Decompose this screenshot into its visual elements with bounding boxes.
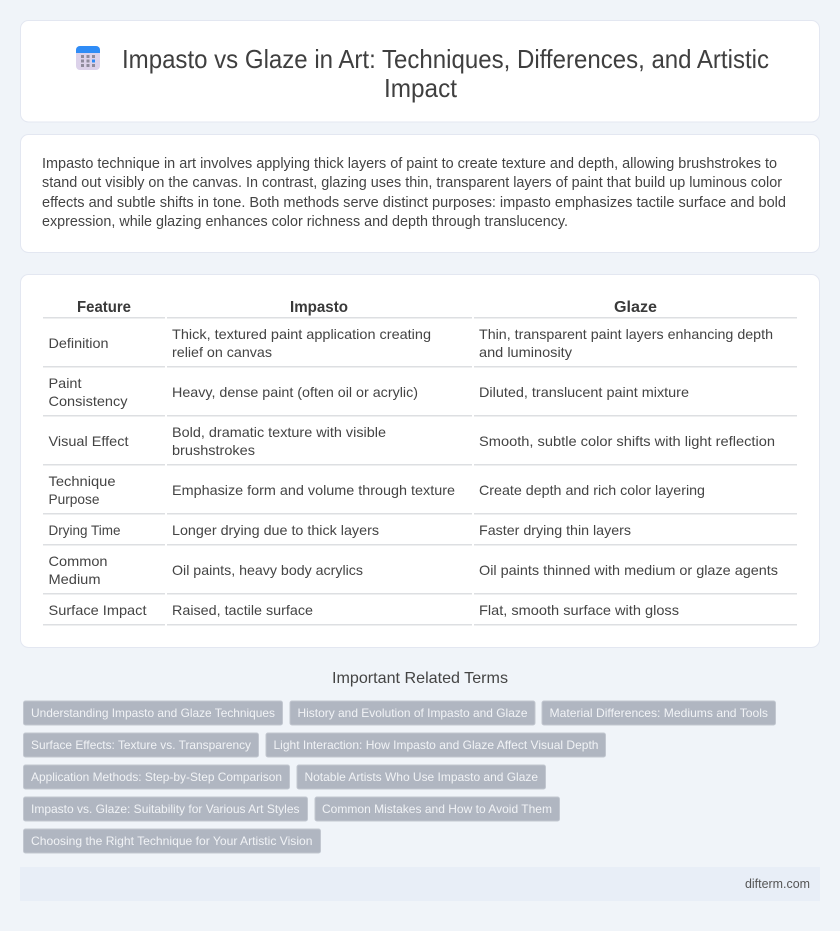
row: technique purpose: Create depth and rich color layering [479,482,705,498]
row: common medium: Oil paints thinned with medium or glaze agents [479,562,778,578]
panel: comparison table [20,274,820,648]
tag row 4 [24,797,560,821]
row: drying time: Faster drying thin layers [479,522,631,538]
row: common medium: Common [48,553,108,569]
row: drying time: Longer drying due to thick layers [172,522,379,538]
row: technique purpose: Emphasize form and volume through texture [172,482,455,498]
panel: related term tags [24,701,776,853]
row: paint consistency: Heavy, dense paint (often oil or acrylic) [172,384,418,400]
tag row 3: Notable Artists Who Use Impasto and Glaze [304,770,538,784]
tag row 5 [24,829,320,853]
tag row 4: Impasto vs. Glaze: Suitability for Various Art Styles [31,802,300,816]
row: visual effect [43,424,797,466]
row: common medium [43,553,797,594]
row: definition [43,326,797,368]
row: surface impact: Flat, smooth surface with gloss [479,602,679,618]
row: definition: Definition [48,335,108,351]
row: technique purpose: Purpose [48,491,100,507]
tag row 1: History and Evolution of Impasto and Glaze [298,706,528,720]
table header row: Impasto [290,299,348,316]
row: drying time [43,522,797,546]
row: definition: and luminosity [479,344,572,360]
tag row 2: Light Interaction: How Impasto and Glaze Affect Visual Depth [274,738,598,752]
tag row 1: Material Differences: Mediums and Tools [550,706,768,720]
row: paint consistency [43,375,797,416]
row: technique purpose: Technique [48,473,116,489]
tag row 5: Choosing the Right Technique for Your Artistic Vision [31,834,312,848]
panel: introduction text: Impasto technique in art involves applying thick layers of paint to create texture and depth, allowing brushstrokes to [42,156,777,172]
table header row: Feature [77,299,131,316]
panel: introduction text: effects and subtle shifts in tone. Both methods serve distinct purposes: impasto emphasizes tactile surface and bold [42,195,786,211]
panel: introduction text [20,134,820,252]
row: paint consistency: Paint [48,375,82,391]
row: definition: Thick, textured paint application creating [172,326,431,342]
row: definition: relief on canvas [172,344,272,360]
tag row 1: Understanding Impasto and Glaze Techniques [31,706,275,720]
panel: header [20,20,820,122]
row: common medium: Medium [48,571,100,587]
tag row 1 [24,701,776,725]
row: visual effect: Visual Effect [48,433,129,449]
table header row [43,299,797,318]
heading: important related terms: Important Related Terms [332,670,508,687]
icon: calendar [76,46,100,70]
panel: introduction text: expression, while glazing enhances color richness and depth through translucency. [42,214,568,230]
row: surface impact [43,602,797,626]
tag row 3 [24,765,546,789]
row: visual effect: brushstrokes [172,442,255,458]
row: common medium: Oil paints, heavy body acrylics [172,562,363,578]
panel: introduction text: stand out visibly on the canvas. In contrast, glazing uses thin, transparent layers of paint that build up luminous color [42,175,782,191]
title [122,46,769,103]
tag row 2: Surface Effects: Texture vs. Transparency [31,738,251,752]
footer: difterm.com [745,876,810,891]
row: definition: Thin, transparent paint layers enhancing depth [479,326,773,342]
row: drying time: Drying Time [48,522,121,538]
row: technique purpose [43,473,797,514]
title: Impasto vs Glaze in Art: Techniques, Differences, and Artistic [122,46,769,74]
row: surface impact: Raised, tactile surface [172,602,313,618]
table header row: Glaze [614,299,657,316]
row: paint consistency: Diluted, translucent paint mixture [479,384,689,400]
row: paint consistency: Consistency [48,393,128,409]
row: surface impact: Surface Impact [48,602,147,618]
footer [20,867,820,901]
row: visual effect: Smooth, subtle color shifts with light reflection [479,433,775,449]
row: visual effect: Bold, dramatic texture with visible [172,424,386,440]
title: Impact [384,75,457,103]
tag row 3: Application Methods: Step-by-Step Comparison [31,770,282,784]
tag row 4: Common Mistakes and How to Avoid Them [322,802,552,816]
tag row 2 [24,733,606,757]
